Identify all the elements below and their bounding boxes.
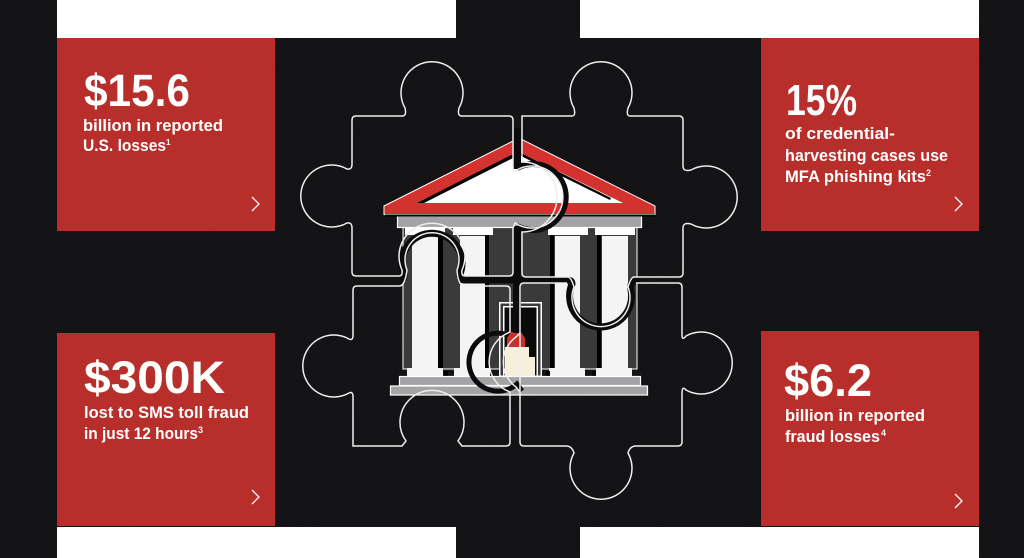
puzzle piece: bottom right xyxy=(503,283,732,499)
stat description: 1 xyxy=(166,138,171,147)
stat description xyxy=(785,124,948,186)
columns xyxy=(412,236,628,368)
capitals xyxy=(405,227,635,235)
stat description: billion in reported xyxy=(785,406,925,425)
stat description xyxy=(785,406,925,446)
icon: chevron xyxy=(955,494,962,508)
teller figure xyxy=(507,332,525,347)
white band: bottom right xyxy=(580,527,979,558)
icon: bank building xyxy=(384,138,655,395)
panel: $300K stat xyxy=(57,333,275,526)
entablature xyxy=(398,216,642,228)
stat value: $300K xyxy=(84,352,226,403)
puzzle seams xyxy=(400,128,640,391)
building wall xyxy=(403,227,637,369)
stack of papers xyxy=(505,347,535,376)
stat description: 3 xyxy=(198,425,203,435)
puzzle piece: bottom left xyxy=(303,233,510,446)
stat description: MFA phishing kits xyxy=(785,167,926,186)
panel: $6.2 billion stat xyxy=(761,331,979,526)
black column separators xyxy=(438,235,601,369)
stat description: fraud losses xyxy=(785,427,880,446)
stat description: 2 xyxy=(926,168,931,178)
doorway xyxy=(499,302,542,376)
stat description: billion in reported xyxy=(83,116,223,135)
stat description: of credential- xyxy=(785,124,895,143)
panel: 15% stat xyxy=(761,38,979,231)
stat description: U.S. losses xyxy=(83,136,166,155)
white band: top left xyxy=(57,0,456,38)
stat description xyxy=(84,403,249,443)
white band: bottom left xyxy=(57,527,456,558)
stat value: $6.2 xyxy=(784,355,872,406)
roof xyxy=(384,138,655,216)
base steps xyxy=(400,376,640,386)
column bases xyxy=(407,368,632,376)
icon: chevron xyxy=(252,197,259,211)
stat description: lost to SMS toll fraud xyxy=(84,403,249,422)
white band: top right xyxy=(580,0,979,38)
panel: $15.6 billion stat xyxy=(57,38,275,231)
icon: chevron xyxy=(252,490,259,504)
puzzle piece: top left xyxy=(301,62,563,276)
puzzle piece: top right xyxy=(522,62,737,327)
stat description: harvesting cases use xyxy=(785,146,948,165)
stat description xyxy=(83,116,223,155)
stat description: in just 12 hours xyxy=(84,424,198,443)
stat description: 4 xyxy=(881,428,886,438)
stat value: $15.6 xyxy=(84,65,190,116)
icon: chevron xyxy=(955,197,962,211)
stat value: 15% xyxy=(786,76,857,125)
